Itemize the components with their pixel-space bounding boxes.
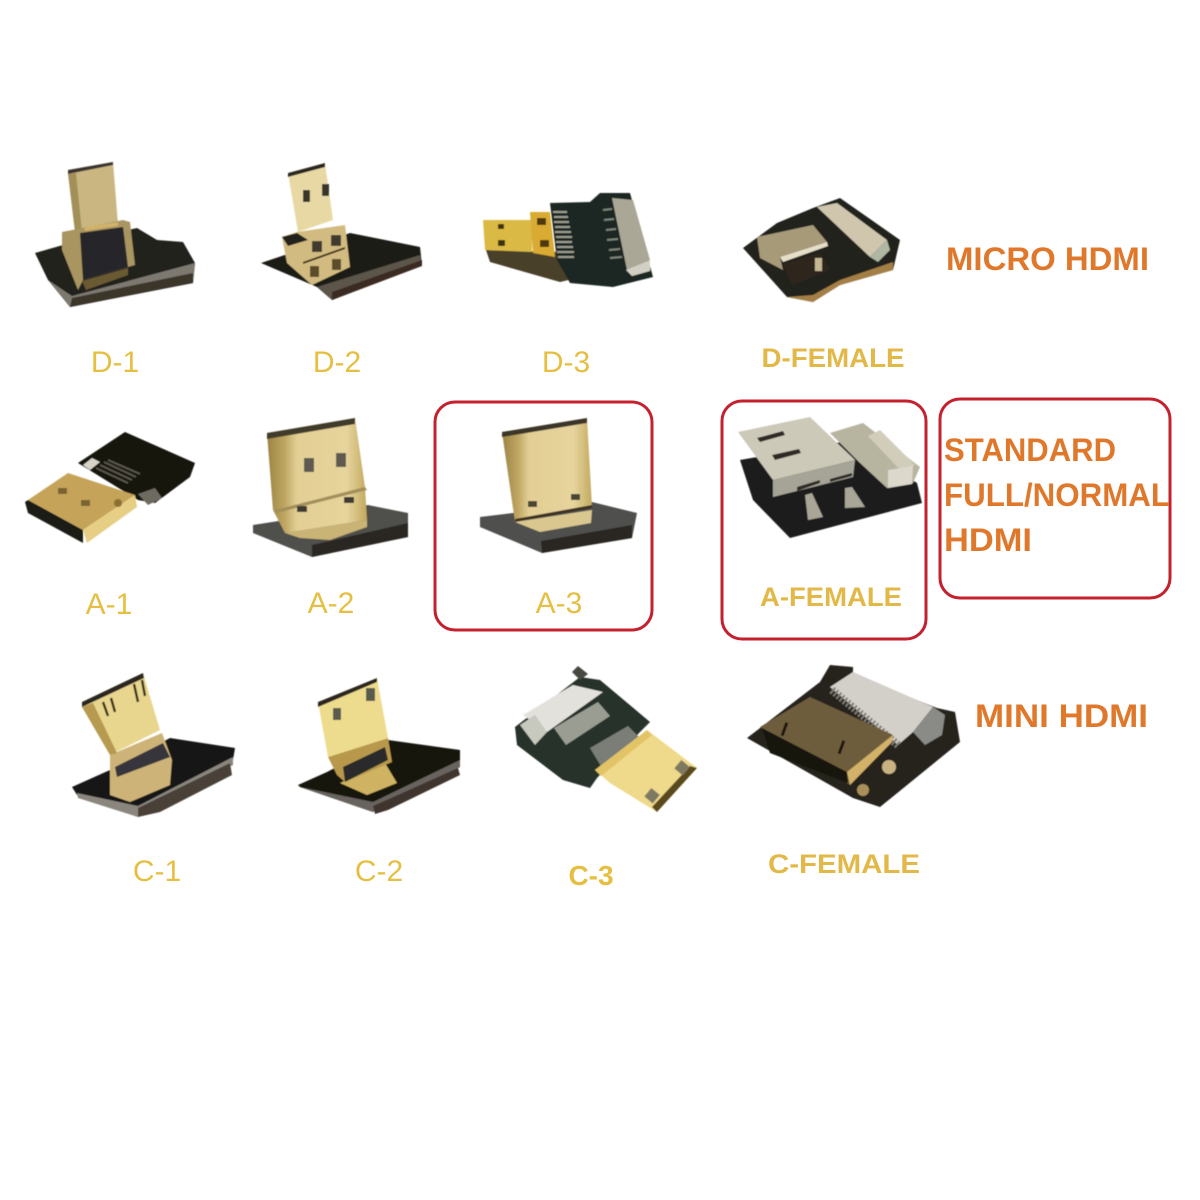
heading: STANDARD FULL/NORMAL HDMI [944,432,1170,558]
panel: A-3 red outline [435,402,652,630]
label: D-FEMALE: D-FEMALE [762,343,904,373]
heading: MICRO HDMI: MICRO HDMI [946,241,1149,277]
label: A-2: A-2 [308,587,354,620]
panel: A-FEMALE red outline [722,401,926,639]
icon: A-2 connector [253,418,408,557]
heading: MINI HDMI: MINI HDMI [975,698,1148,734]
label: D-2: D-2 [313,346,361,379]
icon: A-1 connector [25,432,195,543]
icon: A-FEMALE connector [738,417,922,538]
heading: STANDARD FULL/NORMAL HDMI: HDMI [944,522,1032,558]
icon: C-2 connector [298,678,460,814]
label: A-3: A-3 [536,587,582,620]
icon: C-1 connector [72,673,235,817]
label: D-1: D-1 [91,346,139,379]
heading: STANDARD FULL/NORMAL HDMI: FULL/NORMAL [944,477,1170,513]
label: D-3: D-3 [542,346,590,379]
icon: D-2 connector [261,163,422,300]
icon: C-FEMALE connector [747,665,960,807]
icon: D-3 connector [483,193,653,287]
icon: D-1 connector [35,162,195,307]
label: C-3: C-3 [568,860,614,891]
heading: STANDARD FULL/NORMAL HDMI: STANDARD [944,432,1116,468]
panel: standard HDMI red outline [940,399,1170,598]
label: C-FEMALE: C-FEMALE [768,849,920,879]
label: C-1: C-1 [133,855,181,888]
label: C-2: C-2 [355,855,403,888]
icon: A-3 connector [480,418,637,553]
icon: C-3 connector [515,666,697,812]
label: A-FEMALE: A-FEMALE [760,582,902,612]
label: A-1: A-1 [86,588,132,621]
icon: D-FEMALE connector [743,198,900,302]
